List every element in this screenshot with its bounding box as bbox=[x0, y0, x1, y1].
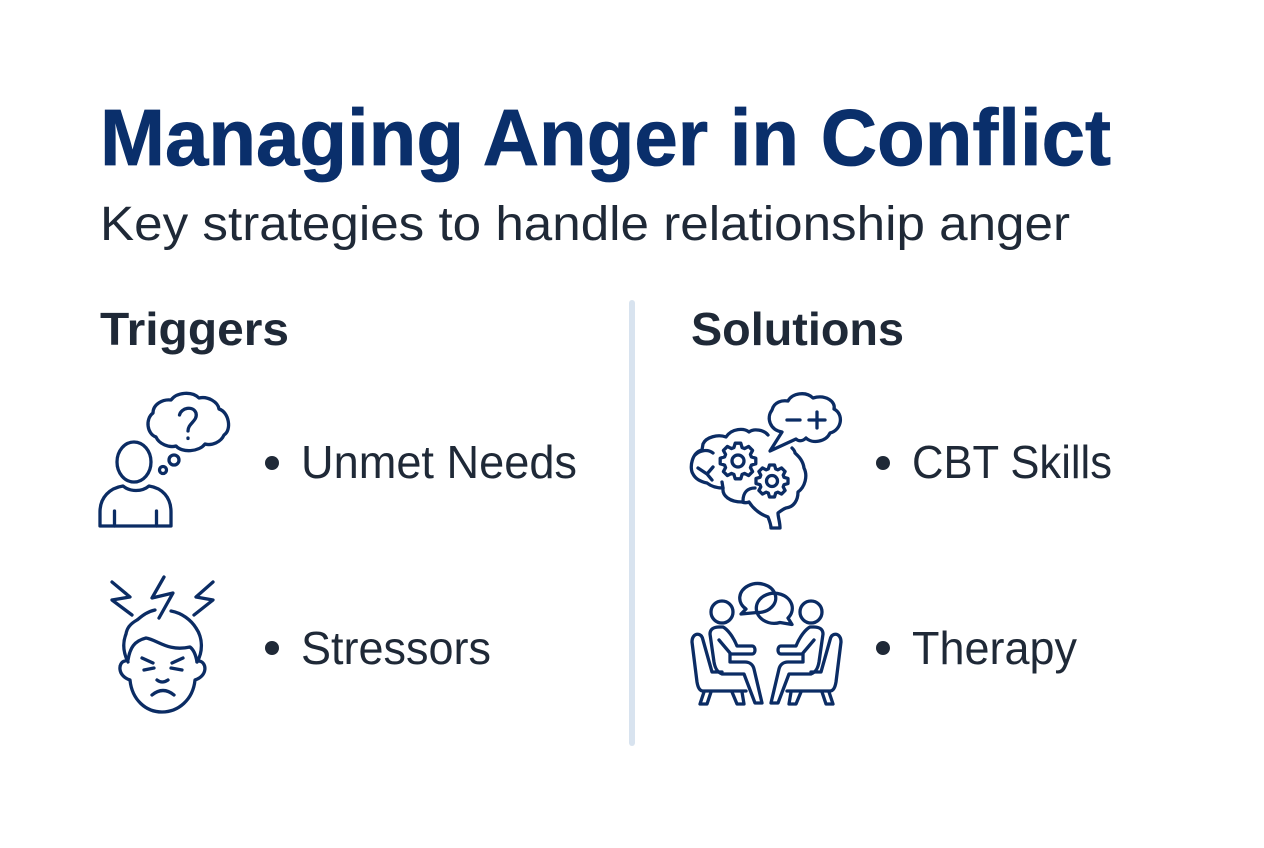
right person and chair bbox=[771, 601, 841, 704]
list item: unmet needs: Unmet Needs bbox=[301, 436, 577, 488]
list item: cbt skills: CBT Skills bbox=[912, 436, 1112, 488]
subtitle: Key strategies to handle relationship anger bbox=[100, 198, 1070, 251]
left person and chair bbox=[692, 601, 762, 704]
list item: stressors: Stressors bbox=[301, 622, 491, 674]
title: Managing Anger in Conflict bbox=[100, 93, 1111, 182]
heading: triggers: Triggers bbox=[100, 303, 289, 355]
icon: person with question thought bbox=[100, 393, 229, 526]
icon: two people in therapy conversation bbox=[692, 584, 841, 704]
heading: solutions: Solutions bbox=[691, 303, 904, 355]
list item: therapy: Therapy bbox=[912, 622, 1077, 674]
icon: stressed face with lightning bbox=[112, 577, 213, 712]
icon: brain with gears and speech bubble bbox=[691, 394, 840, 528]
divider bbox=[629, 300, 635, 746]
